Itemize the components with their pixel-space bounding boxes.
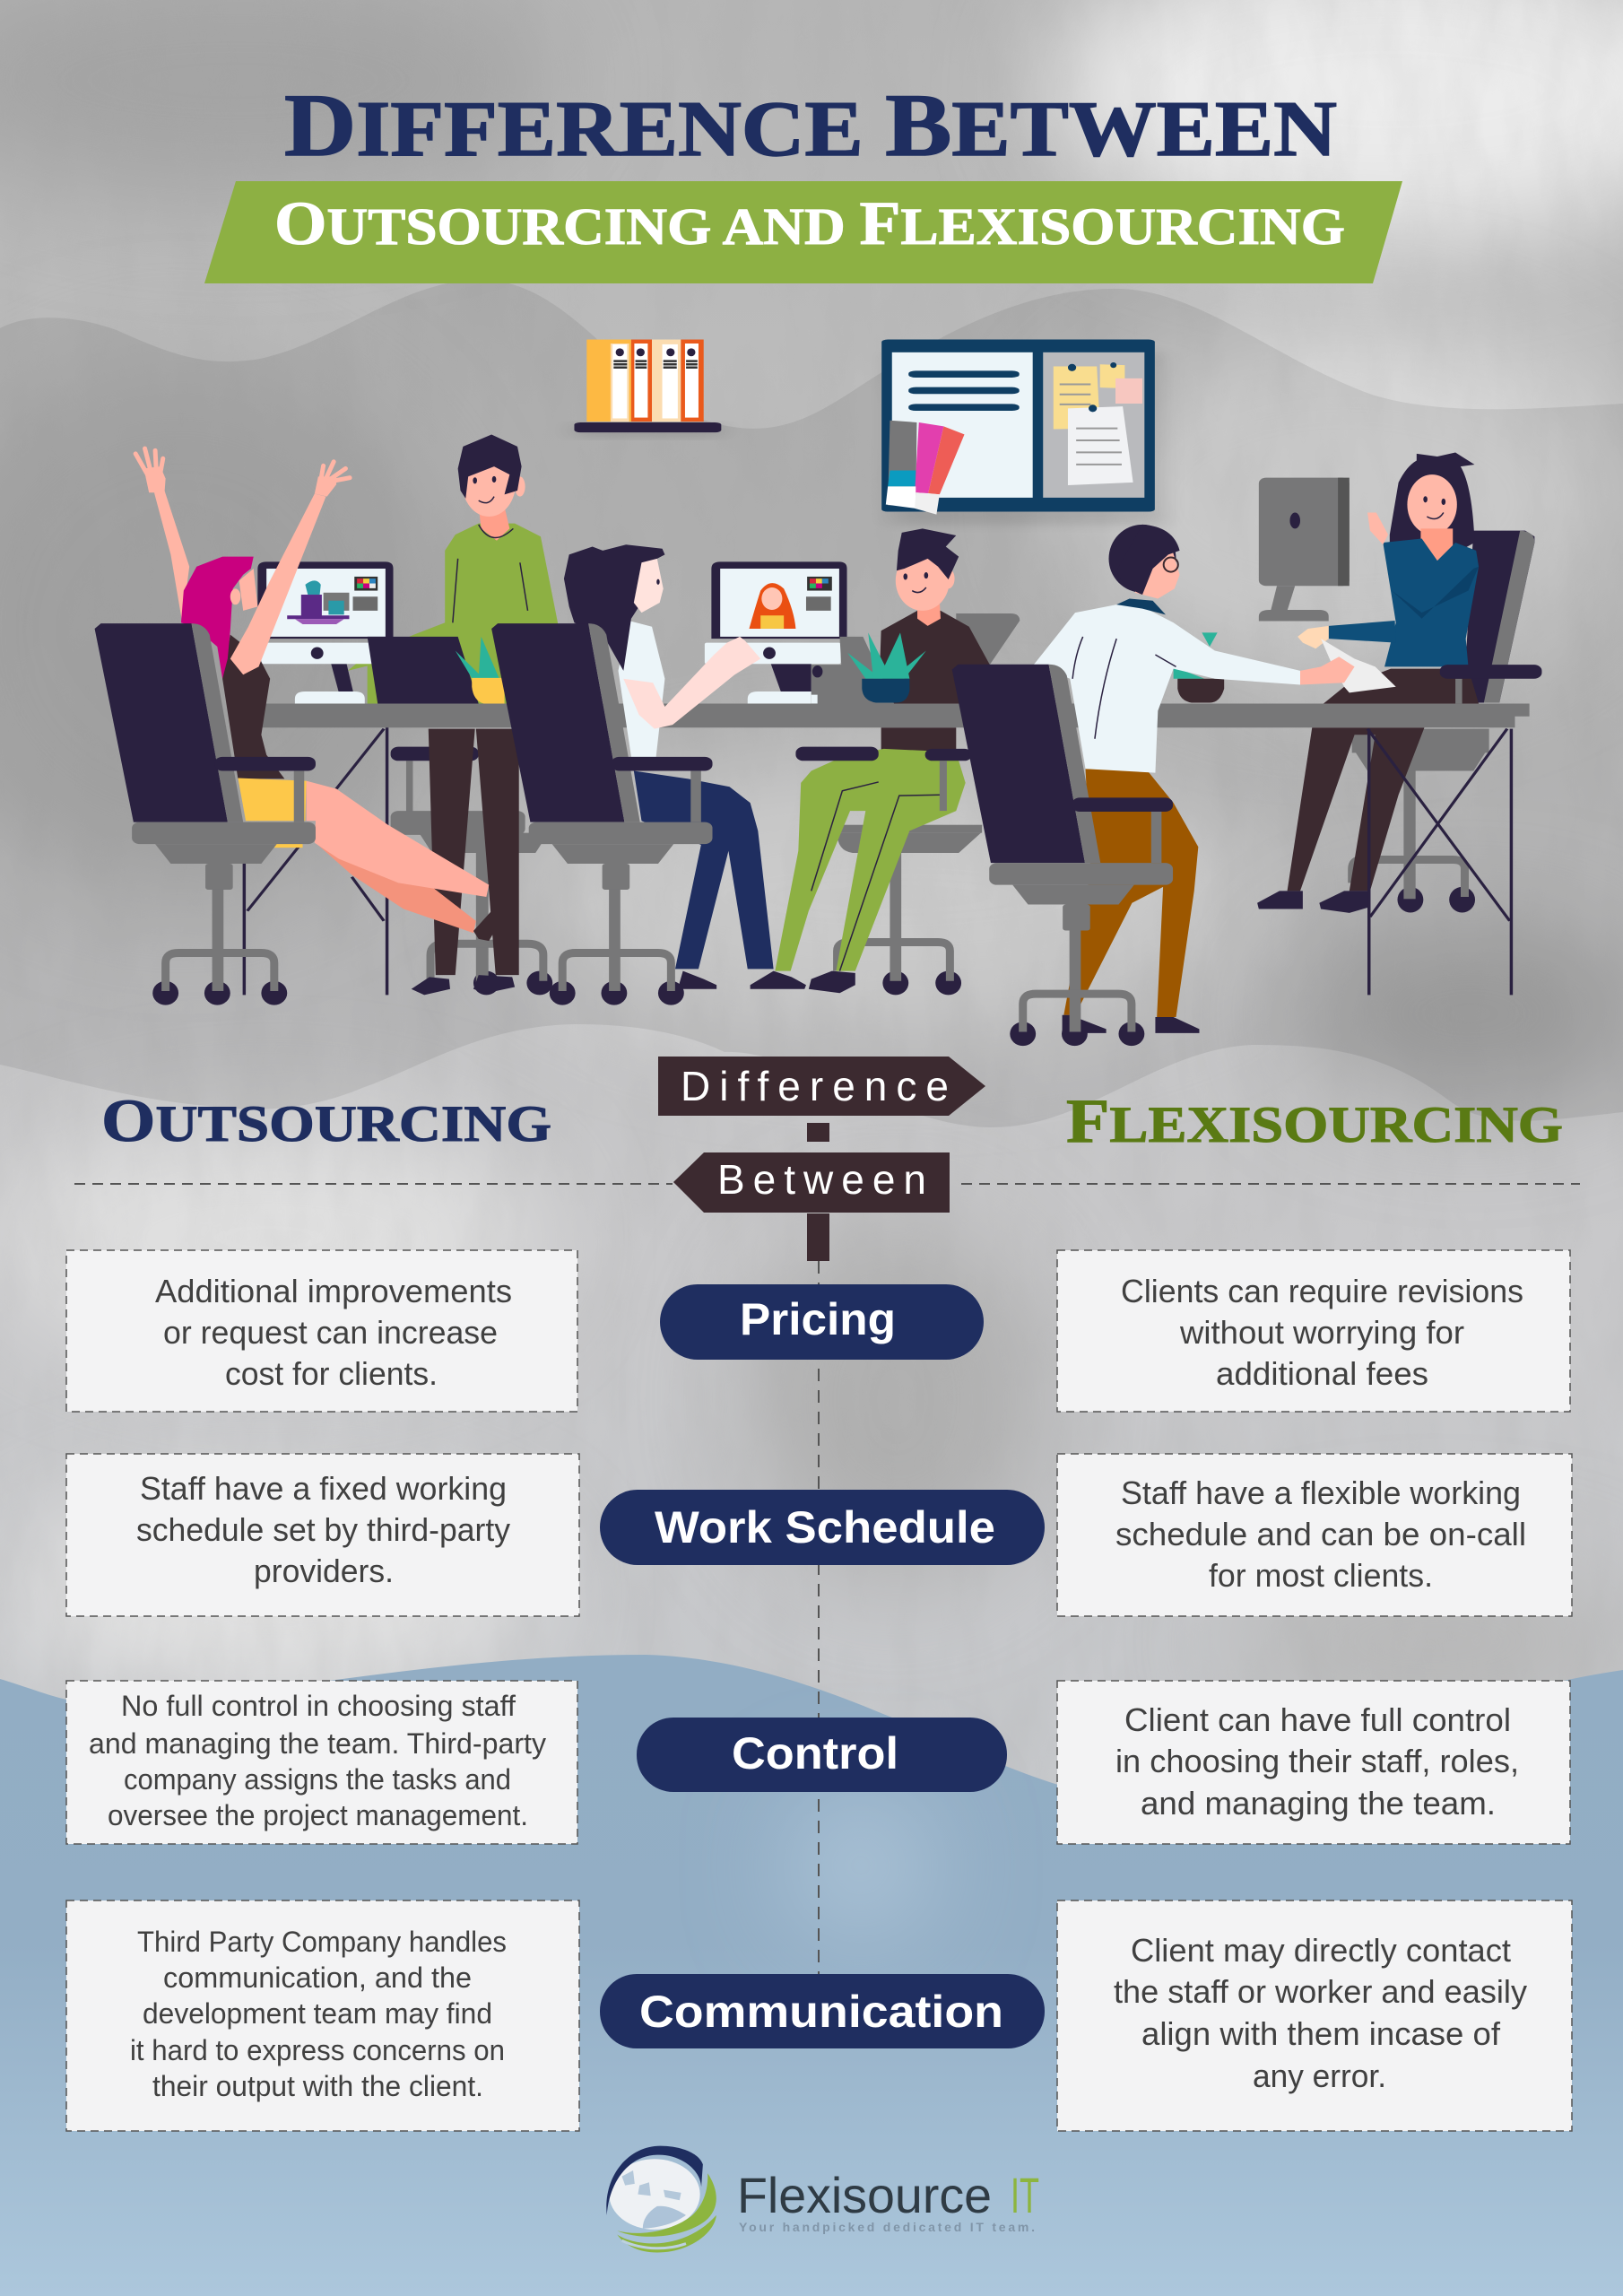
chair of the seated woman xyxy=(491,623,713,1005)
background: dark translucent wave band xyxy=(0,280,1623,1127)
panel: communication, outsourcing: Third Party Company handles xyxy=(137,1926,507,1958)
panel: work schedule, flexisourcing: for most clients. xyxy=(1209,1557,1433,1594)
screen: designer at a desk xyxy=(287,577,378,624)
panel: communication, flexisourcing: align with them incase of xyxy=(1141,2015,1501,2052)
background: blue wave at the bottom xyxy=(0,1655,1623,2296)
tagline: Your handpicked dedicated IT team. xyxy=(739,2220,1035,2234)
panel: work schedule, flexisourcing: Staff have a flexible working xyxy=(1121,1474,1521,1511)
panel: control, outsourcing: No full control in choosing staff xyxy=(121,1690,516,1722)
sign: Between xyxy=(673,1152,950,1213)
figure: green trousers of the man at the desk xyxy=(775,747,972,993)
label: Communication: Communication xyxy=(639,1987,1003,2037)
panel: pricing, flexisourcing xyxy=(1057,1250,1570,1412)
seated woman in blue with chair and monitor back xyxy=(1257,453,1534,913)
panel: work schedule, flexisourcing xyxy=(1057,1454,1572,1616)
icon: colour swatch fan xyxy=(886,421,965,515)
panel: communication, flexisourcing xyxy=(1057,1900,1572,2131)
icon: teal plant in navy pot xyxy=(847,632,926,703)
icon: laptop on the desk xyxy=(368,637,479,703)
gray laptop xyxy=(812,637,894,703)
illustration: wall shelf and board (shared coordinate group) xyxy=(574,340,1163,525)
icon: globe with swooshes xyxy=(606,2146,716,2253)
screen: red-haired portrait xyxy=(749,577,832,629)
label: Control: Control xyxy=(732,1728,898,1779)
armrest of the woman in blue xyxy=(1440,665,1541,703)
panel: communication, outsourcing: their output with the client. xyxy=(152,2070,483,2102)
icon: plant in dark pot behind the man in white xyxy=(1174,632,1224,703)
subtitle banner: OUTSOURCING AND FLEXISOURCING xyxy=(274,189,1345,257)
icon: right monitor xyxy=(705,561,847,703)
icon: left monitor xyxy=(257,561,394,703)
label: Control xyxy=(637,1718,1007,1792)
icon: yellow potted plant xyxy=(456,637,505,703)
signpost xyxy=(658,1057,985,1261)
panel: control, outsourcing: and managing the team. Third-party xyxy=(89,1727,546,1760)
horizontal dashed divider xyxy=(74,1183,1580,1185)
icon: monitor seen from the back xyxy=(1259,478,1350,621)
panel: control, outsourcing xyxy=(66,1681,577,1844)
vertical dashed connector xyxy=(818,1261,820,1974)
panel: control, flexisourcing: Client can have full control xyxy=(1124,1701,1511,1738)
label: Pricing xyxy=(660,1284,984,1360)
panel: pricing, outsourcing xyxy=(66,1250,577,1412)
figure: man in white shirt with chair xyxy=(952,525,1355,1046)
figure: woman with pink hair raising arms and her chair xyxy=(95,448,499,1005)
panel: work schedule, flexisourcing: schedule and can be on-call xyxy=(1115,1516,1526,1552)
panel: pricing, outsourcing: Additional improvements xyxy=(155,1273,512,1309)
panel: communication, flexisourcing: the staff or worker and easily xyxy=(1114,1973,1527,2010)
panel: pricing, flexisourcing: additional fees xyxy=(1216,1355,1428,1392)
panel: work schedule, outsourcing: providers. xyxy=(254,1552,394,1589)
sign: Between: Between xyxy=(717,1156,926,1203)
panel: pricing, flexisourcing: without worrying for xyxy=(1179,1314,1464,1351)
far chair behind the standing man xyxy=(391,747,552,995)
sign: Difference: Difference xyxy=(681,1063,949,1109)
desk top and frame xyxy=(244,703,1530,995)
panel: communication, flexisourcing: any error. xyxy=(1253,2057,1386,2094)
panel: communication, outsourcing: development team may find xyxy=(143,1997,492,2030)
panel: work schedule, outsourcing: schedule set by third-party xyxy=(136,1511,510,1548)
figure: man at the desk facing forward xyxy=(812,528,1224,752)
icon: pin board xyxy=(881,340,1163,525)
chair of the pink-haired woman xyxy=(95,623,316,1005)
panel: control, flexisourcing: and managing the team. xyxy=(1141,1785,1496,1822)
panel: control, outsourcing: company assigns the tasks and xyxy=(124,1763,511,1796)
label: Work Schedule xyxy=(600,1490,1045,1565)
chair behind the desk xyxy=(1352,531,1534,912)
panel: control, flexisourcing xyxy=(1057,1681,1570,1844)
logo: Flexisource IT: IT xyxy=(1011,2167,1039,2223)
subtitle banner xyxy=(204,181,1402,283)
panel: communication, outsourcing xyxy=(66,1900,579,2131)
panel: work schedule, outsourcing xyxy=(66,1454,579,1616)
illustration: office scene xyxy=(95,434,1541,1046)
label: Work Schedule: Work Schedule xyxy=(655,1502,995,1552)
label: Pricing: Pricing xyxy=(740,1294,896,1344)
far chair behind the man in green trousers xyxy=(838,613,1020,995)
logo: Flexisource IT xyxy=(606,2146,1039,2253)
label: Communication xyxy=(600,1974,1045,2048)
title: DIFFERENCE BETWEEN xyxy=(284,75,1337,175)
sign: Difference xyxy=(658,1057,985,1116)
panel: control, outsourcing: oversee the project management. xyxy=(108,1799,528,1831)
panel: pricing, outsourcing: or request can increase xyxy=(163,1314,498,1351)
panel: work schedule, outsourcing: Staff have a fixed working xyxy=(140,1470,507,1507)
panel: pricing, flexisourcing: Clients can require revisions xyxy=(1121,1273,1523,1309)
chair of the man in white xyxy=(952,665,1173,1046)
figure: woman in blue xyxy=(1257,453,1479,913)
figure: woman with long dark hair and her chair xyxy=(491,544,806,1005)
panel: communication, outsourcing: it hard to express concerns on xyxy=(130,2034,505,2066)
panel: pricing, outsourcing: cost for clients. xyxy=(225,1355,438,1392)
panel: communication, outsourcing: communication, and the xyxy=(163,1961,472,1994)
wordmark: Flexisource xyxy=(737,2167,992,2223)
heading: Flexisourcing column: FLEXISOURCING xyxy=(1066,1087,1563,1156)
icon: shelf with binders xyxy=(574,340,721,437)
panel: communication, flexisourcing: Client may directly contact xyxy=(1131,1932,1511,1969)
heading: Outsourcing column: OUTSOURCING xyxy=(101,1086,551,1154)
figure: standing man in green sweater xyxy=(348,434,558,995)
panel: control, flexisourcing: in choosing their staff, roles, xyxy=(1115,1743,1519,1779)
